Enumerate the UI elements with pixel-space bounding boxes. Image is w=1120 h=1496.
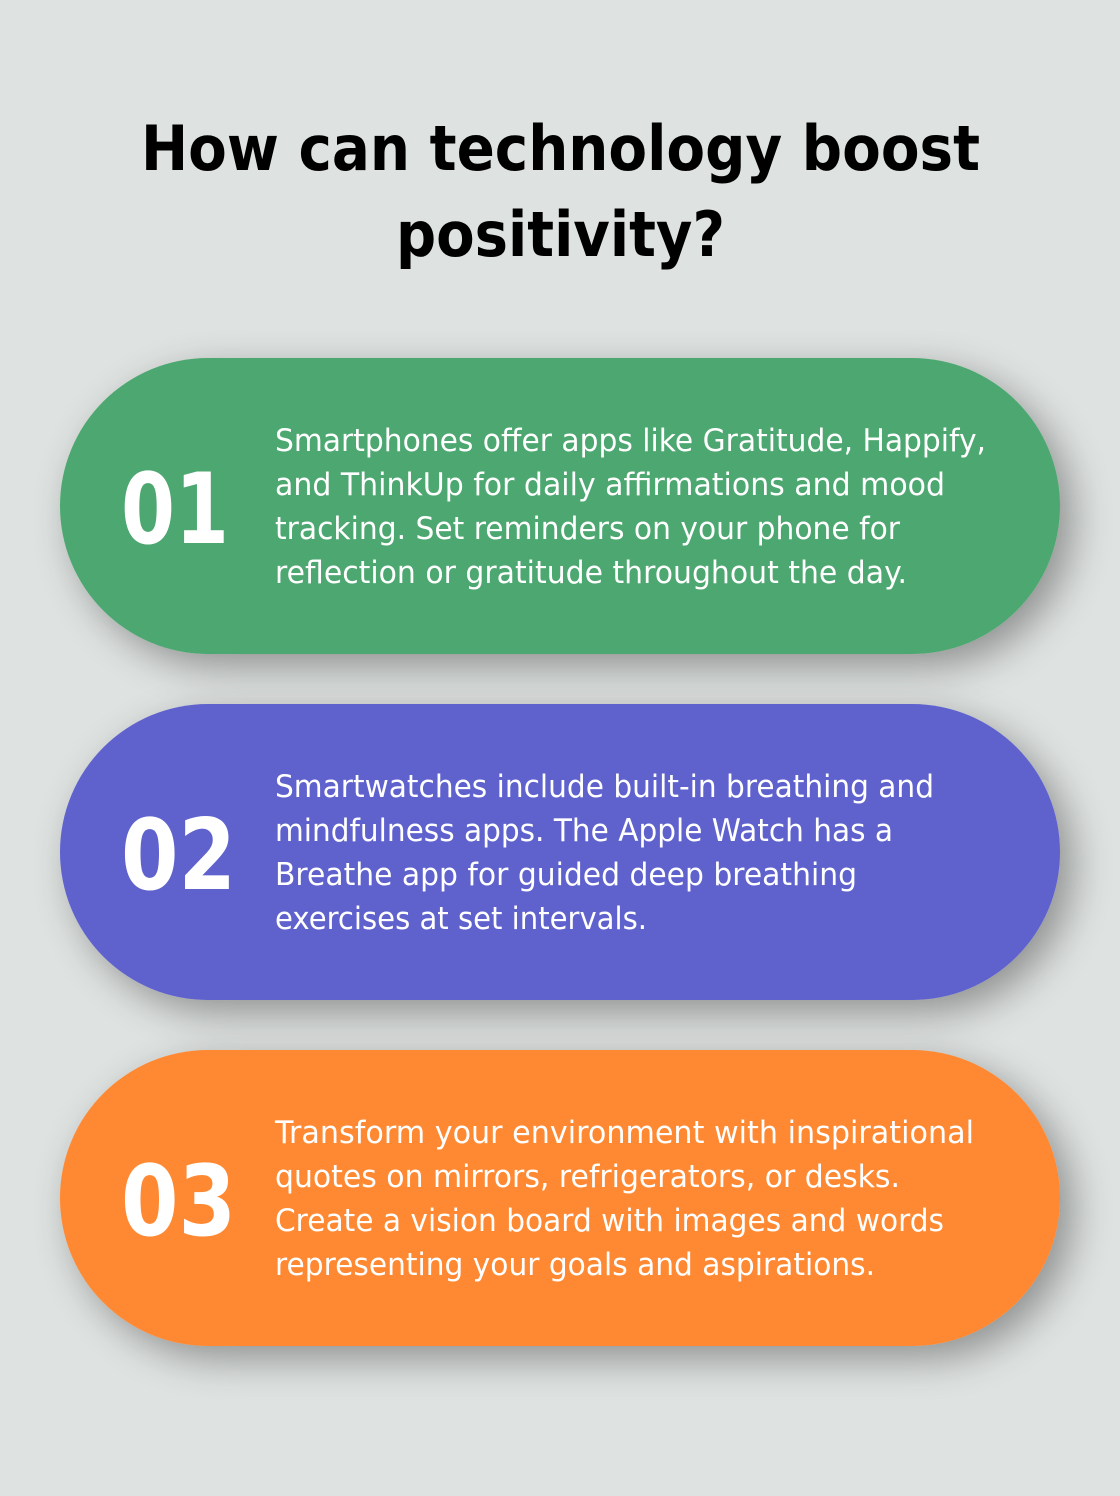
number 02: 02 xyxy=(121,799,236,913)
text block: step 01: Smartphones offer apps like Gratitude, Happify, xyxy=(275,423,986,459)
text block: step 03: quotes on mirrors, refrigerators, or desks. xyxy=(275,1159,900,1195)
text block: step 02: Breathe app for guided deep breathing xyxy=(275,857,857,893)
number 03: 03 xyxy=(121,1145,236,1259)
text block: step 02: mindfulness apps. The Apple Watch has a xyxy=(275,813,893,849)
text block: step 02 xyxy=(275,769,934,937)
text block: step 03: Transform your environment with inspirational xyxy=(274,1115,974,1151)
text block: step 01: tracking. Set reminders on your phone for xyxy=(275,511,900,547)
number 01: 01 xyxy=(121,453,229,567)
title: positivity? xyxy=(396,198,725,271)
text block: step 02: exercises at set intervals. xyxy=(275,901,647,937)
text block: step 03: representing your goals and aspirations. xyxy=(275,1247,875,1283)
panel: step 02 xyxy=(60,704,1060,1000)
text block: step 01: reflection or gratitude throughout the day. xyxy=(275,555,907,591)
pill: indigo xyxy=(60,704,1060,1000)
title xyxy=(141,112,980,271)
text block: step 01 xyxy=(275,423,986,591)
pill: orange xyxy=(60,1050,1060,1346)
text block: step 01: and ThinkUp for daily affirmations and mood xyxy=(275,467,945,503)
panel: step 03 xyxy=(60,1050,1060,1346)
title: How can technology boost xyxy=(141,112,980,185)
pill: green xyxy=(60,358,1060,654)
text block: step 02: Smartwatches include built-in breathing and xyxy=(275,769,934,805)
text block: step 03: Create a vision board with images and words xyxy=(275,1203,944,1239)
text block: step 03 xyxy=(274,1115,974,1283)
panel: step 01 xyxy=(60,358,1060,654)
